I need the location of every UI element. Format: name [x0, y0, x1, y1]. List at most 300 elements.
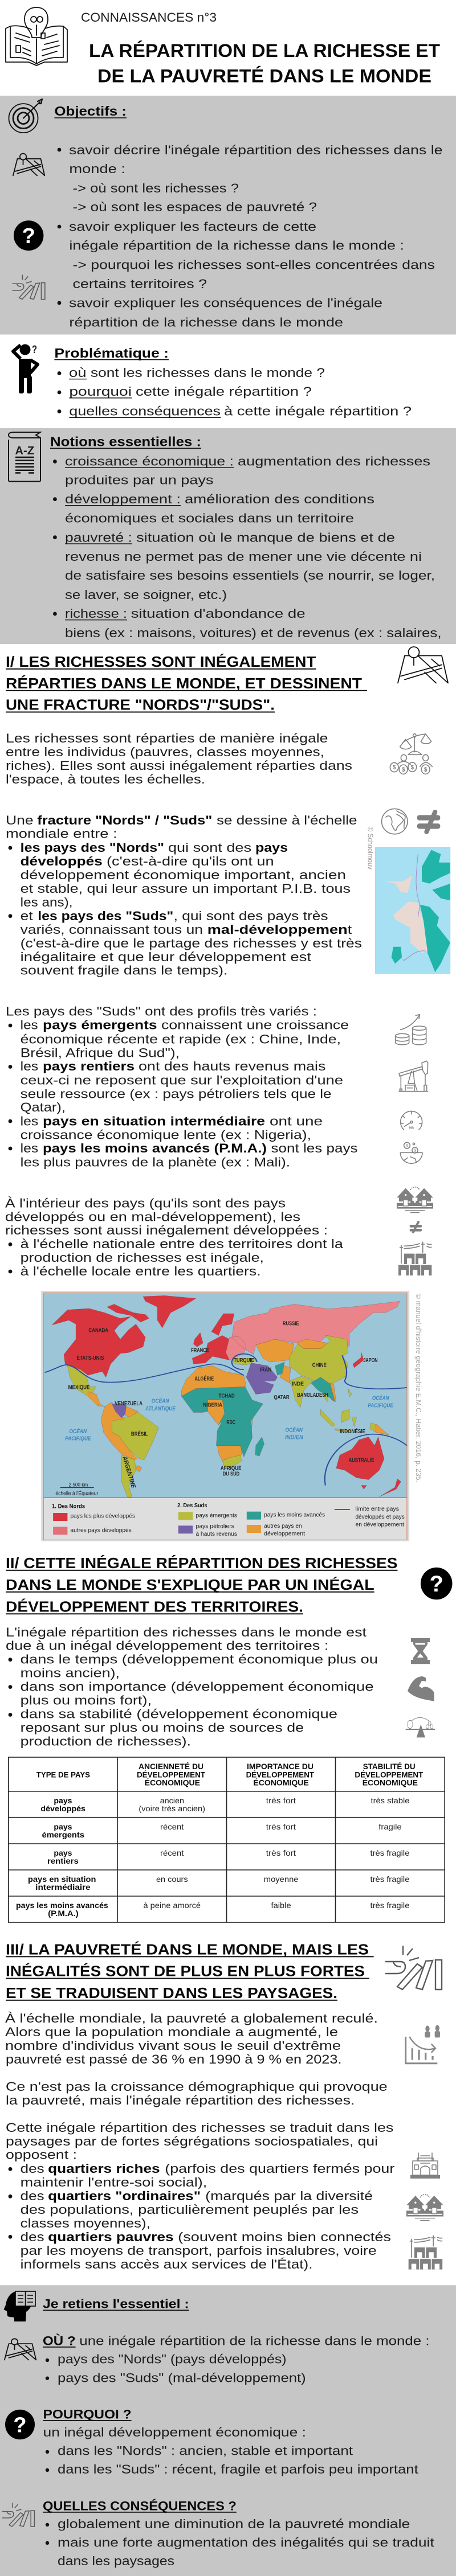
icon: rich mansion: [410, 2153, 440, 2179]
text block: fracture Nords / Suds: développés: [21, 854, 103, 868]
icon: coins with rising arrow: [396, 1015, 426, 1045]
text block: ségrégations sociospatiales: classes moyennes),: [21, 2216, 150, 2230]
text block: inégal développement: dans sa stabilité (développement économique: [21, 1707, 337, 1721]
objectifs list: [58, 143, 443, 329]
text block: profils des Suds: seule ressource (ex : pays pétroliers tels que le: [21, 1087, 332, 1101]
icon: scales and money: $: [393, 764, 396, 771]
title: DE LA PAUVRETÉ DANS LE MONDE: [97, 66, 431, 87]
icon: question mark (section II): ?: [429, 1572, 443, 1597]
text block: fracture Nords / Suds: mal-développemen: [207, 922, 348, 937]
text block: fracture Nords / Suds: les ans),: [21, 895, 73, 909]
objectifs list: certains territoires ?: [73, 277, 207, 291]
text block: profils des Suds: croissance économique lente (ex : Nigeria),: [21, 1127, 311, 1142]
text block: inégalités à l'intérieur des pays: [5, 1196, 344, 1278]
table header: [36, 1762, 424, 1787]
text block: inégal développement: moins ancien),: [21, 1666, 120, 1680]
objectifs list: monde :: [69, 162, 125, 176]
text block: inégalités entre individus: Les richesses sont réparties de manière inégale: [6, 731, 328, 745]
map legend: limite entre pays: [355, 1506, 400, 1512]
text block: profils des Suds: Les pays des "Suds" ont des profils très variés :: [6, 1004, 317, 1019]
map scale: échelle à l'Équateur: [55, 1490, 99, 1496]
icon: muscle arm: [408, 1676, 434, 1701]
text block: ségrégations sociospatiales: (souvent moins bien connectés: [178, 2230, 391, 2244]
heading: section II: DANS LE MONDE S'EXPLIQUE PAR UN INÉGAL: [6, 1577, 374, 1593]
text block: fracture Nords / Suds: variés, connaissant tous un: [21, 922, 203, 937]
map legend: à hauts revenus: [196, 1531, 237, 1537]
objectifs list: inégale répartition de la richesse dans le monde :: [69, 239, 404, 253]
text block: profils des Suds: [6, 1004, 358, 1169]
text block: ségrégations sociospatiales: Cette inégale répartition des richesses se traduit dans les: [6, 2120, 393, 2135]
map legend: autres pays en: [264, 1523, 302, 1529]
table rows: à peine amorcé: [144, 1901, 201, 1910]
map: small rotated world map: [375, 847, 450, 974]
text block: ségrégations sociospatiales: quartiers pauvres: [48, 2230, 174, 2244]
map legend: en développement: [355, 1522, 404, 1528]
map labels: ALGÉRIE: [194, 1376, 214, 1382]
text block: inégalités entre individus: l'espace, à toutes les échelles.: [6, 772, 205, 786]
caption: map source: © manuel d'histoire géographie E.M.C., Hatier, 2016, p. 235.: [414, 1294, 422, 1482]
table rows: rentiers: [47, 1856, 79, 1865]
icon: broken bowl with dollars: $: [406, 1143, 408, 1148]
table header: DÉVELOPPEMENT: [246, 1770, 314, 1779]
text block: fracture Nords / Suds: développement économique important, ancien: [21, 868, 346, 882]
text block: ségrégations sociospatiales: la pauvreté, mais l'inégale répartition des richesses.: [6, 2093, 355, 2107]
icon: falling dominoes (section III): [385, 1946, 442, 1990]
text block: ségrégations sociospatiales: informels sans accès aux services de l'État).: [21, 2257, 312, 2271]
text block: profils des Suds: les: [21, 1059, 38, 1073]
heading: section III: III/ LA PAUVRETÉ DANS LE MONDE, MAIS LES: [6, 1942, 369, 1958]
icon: map with pin: [13, 154, 44, 175]
text block: ségrégations sociospatiales: des: [21, 2189, 44, 2203]
text block: profils des Suds: pays les moins avancés (P.M.A.): [43, 1141, 267, 1155]
notions list: économiques et sociales dans un territoire: [65, 511, 354, 526]
ocean labels: PACIFIQUE: [65, 1436, 91, 1442]
text block: profils des Suds: les: [21, 1141, 38, 1155]
heading: section I: I/ LES RICHESSES SONT INÉGALEMENT: [6, 654, 316, 670]
icon: thinking person: [13, 344, 38, 393]
panel: problématique: [13, 344, 412, 418]
text block: profils des Suds: les: [21, 1018, 38, 1032]
map labels: DU SUD: [223, 1471, 239, 1477]
table rows: (P.M.A.): [48, 1909, 79, 1918]
problématique list: où: [69, 366, 87, 380]
map legend: 2. Des Suds: [177, 1503, 207, 1509]
map labels: VENEZUELA: [115, 1401, 142, 1407]
ocean labels: PACIFIQUE: [368, 1402, 393, 1409]
block: pourquoi: [43, 2407, 418, 2476]
objectifs list: savoir décrire l'inégale répartition des richesses dans le: [69, 143, 442, 157]
icon: question mark (summary): ?: [13, 2413, 27, 2437]
objectifs list: -> pourquoi les richesses sont-elles concentrées dans: [73, 258, 435, 272]
objectifs list: savoir expliquer les facteurs de cette: [69, 220, 316, 234]
text block: ségrégations sociospatiales: [6, 2079, 394, 2271]
panel: notions essentielles: [0, 428, 456, 644]
heading: section I: [6, 654, 367, 713]
text block: fracture Nords / Suds: souvent fragile dans le temps).: [21, 963, 227, 978]
problématique list: à cette inégale répartition ?: [224, 404, 412, 418]
icon: falling dominoes: [12, 275, 45, 300]
block: où: une inégale répartition de la richesse dans le monde :: [79, 2333, 430, 2348]
icon: scales and money: $: [402, 766, 405, 773]
icon: scales and money: [390, 734, 432, 774]
table rows: très fragile: [370, 1901, 410, 1910]
icon: speedometer: MB: [409, 1126, 414, 1130]
table header: ÉCONOMIQUE: [363, 1778, 418, 1787]
map labels: AUSTRALIE: [349, 1458, 374, 1463]
table rows: faible: [271, 1901, 291, 1910]
block: pourquoi: dans les "Suds" : récent, fragile et parfois peu important: [58, 2462, 418, 2476]
table rows: pays: [54, 1848, 72, 1857]
icon: head with book: [4, 2291, 35, 2321]
text block: recul de la pauvreté: Alors que la population mondiale a augmenté, le: [5, 2025, 338, 2039]
text block: ségrégations sociospatiales: des: [21, 2230, 44, 2244]
text block: fracture Nords / Suds: Une: [6, 813, 34, 827]
objectifs list: savoir expliquer les conséquences de l'inégale: [69, 296, 382, 310]
ocean labels: OCÉAN: [69, 1428, 87, 1435]
table header: IMPORTANCE DU: [247, 1762, 314, 1771]
map labels: QATAR: [274, 1394, 290, 1401]
map labels: CHINE: [312, 1362, 327, 1368]
text block: fracture Nords / Suds: fracture "Nords" / "Suds": [37, 813, 212, 827]
title: [89, 40, 440, 87]
objectifs list: -> où sont les espaces de pauvreté ?: [73, 200, 317, 214]
block: quelles conséquences: QUELLES CONSÉQUENCES ?: [43, 2499, 237, 2513]
text block: inégalités à l'intérieur des pays: développés ou en mal-développement), les: [5, 1209, 300, 1224]
icon: globe: [382, 809, 408, 834]
icon: oil pump: [399, 1061, 428, 1092]
table rows: très fort: [266, 1822, 296, 1831]
heading: section II: II/ CETTE INÉGALE RÉPARTITION DES RICHESSES: [6, 1555, 398, 1572]
map labels: TURQUIE: [234, 1357, 254, 1364]
table rows: ancien: [160, 1796, 184, 1805]
block: quelles conséquences: globalement une diminution de la pauvreté mondiale: [58, 2517, 410, 2531]
table header: ÉCONOMIQUE: [145, 1778, 200, 1787]
map scale: [55, 1482, 99, 1496]
text block: profils des Suds: économique récente et rapide (ex : Chine, Inde,: [21, 1032, 341, 1047]
table header: ÉCONOMIQUE: [253, 1778, 309, 1787]
icon: poor neighbourhood (section III): [409, 2235, 442, 2270]
panel: objectifs: [0, 96, 456, 335]
ocean labels: OCÉAN: [286, 1427, 303, 1433]
map labels: RUSSIE: [283, 1321, 299, 1327]
map labels: MEXIQUE: [68, 1385, 90, 1390]
panel: je retiens l'essentiel: [0, 2285, 456, 2576]
text block: profils des Suds: pays rentiers: [43, 1059, 135, 1073]
icon: map with pin (section I): [398, 647, 448, 683]
problématique list: [58, 366, 412, 418]
text block: recul de la pauvreté: pauvreté est passé de 36 % en 1990 à 9 % en 2023.: [6, 2052, 342, 2066]
notions list: amélioration des conditions: [185, 492, 374, 506]
text block: inégal développement: due à un inégal développement des territoires :: [6, 1639, 328, 1652]
map labels: NIGERIA: [203, 1402, 222, 1408]
title: LA RÉPARTITION DE LA RICHESSE ET: [89, 40, 440, 61]
block: pourquoi: dans les "Nords" : ancien, stable et important: [58, 2444, 353, 2458]
icon: A-Z dictionary: A-Z: [15, 445, 34, 457]
text block: inégalités à l'intérieur des pays: à l'échelle nationale entre des territoires dont la: [21, 1237, 344, 1251]
block: quelles conséquences: dans les paysages: [58, 2554, 174, 2568]
text block: fracture Nords / Suds: qui sont des: [168, 840, 251, 855]
text block: profils des Suds: connaissent une croissance: [161, 1018, 349, 1032]
map legend: pays émergents: [196, 1513, 237, 1519]
icon: question mark: [14, 220, 43, 251]
text block: profils des Suds: Qatar),: [21, 1100, 66, 1114]
icon: question mark (section II): [421, 1568, 453, 1599]
table header: DÉVELOPPEMENT: [355, 1770, 424, 1779]
text block: fracture Nords / Suds: et stable, qui leur assure un important P.I.B. tous: [21, 881, 351, 896]
table rows: pays: [54, 1822, 72, 1831]
map labels: BANGLADESH: [297, 1392, 328, 1398]
icon: question mark (summary): [5, 2410, 35, 2439]
text block: ségrégations sociospatiales: des: [21, 2161, 44, 2176]
text block: ségrégations sociospatiales: quartiers "ordinaires": [48, 2189, 201, 2203]
table rows: (voire très ancien): [139, 1804, 205, 1813]
heading: je retiens l'essentiel: Je retiens l'essentiel :: [43, 2296, 189, 2311]
icon: small not equal: [410, 1222, 422, 1232]
map legend: 1. Des Nords: [52, 1504, 85, 1509]
text block: profils des Suds: les plus pauvres de la planète (ex : Mali).: [21, 1155, 290, 1169]
text block: inégal développement: plus ou moins fort),: [21, 1693, 152, 1708]
notions list: situation où le manque de biens et de: [136, 530, 395, 544]
label: connaissances n°3: CONNAISSANCES n°3: [81, 10, 217, 24]
text block: fracture Nords / Suds: (c'est-à-dire qu'ils ont un: [107, 854, 274, 868]
text block: fracture Nords / Suds: t: [348, 922, 352, 937]
icon: scales and money: $: [424, 766, 427, 773]
text block: inégalités entre individus: [6, 731, 352, 786]
problématique list: pourquoi: [69, 384, 132, 399]
text block: profils des Suds: pays en situation intermédiaire: [43, 1114, 265, 1128]
heading: section III: ET SE TRADUISENT DANS LES PAYSAGES.: [6, 1986, 337, 2001]
text block: fracture Nords / Suds: mondiale entre :: [6, 827, 117, 841]
text block: profils des Suds: les: [21, 1114, 38, 1128]
text block: ségrégations sociospatiales: quartiers riches: [48, 2161, 160, 2176]
icon: target with arrow: [9, 99, 42, 133]
table header: DÉVELOPPEMENT: [137, 1770, 205, 1779]
map: developed and developing countries of the world: [41, 1291, 409, 1541]
table header: STABILITÉ DU: [363, 1762, 416, 1771]
icon: open book with light bulb: [6, 7, 67, 65]
block: pourquoi: POURQUOI ?: [43, 2407, 132, 2421]
map labels: FRANCE: [191, 1348, 209, 1353]
text block: ségrégations sociospatiales: des populations, particulièrement peuplés par les: [21, 2202, 359, 2217]
icon: thinking person: ?: [32, 344, 37, 356]
icon: falling dominoes (summary): [2, 2503, 34, 2526]
heading: objectifs: Objectifs :: [54, 104, 127, 118]
map labels: RDC: [226, 1420, 235, 1426]
table rows: moyenne: [264, 1874, 299, 1884]
icon: map with pin (summary): [5, 2339, 36, 2360]
block: où: pays des "Suds" (mal-développement): [58, 2370, 306, 2385]
text block: profils des Suds: Brésil, Afrique du Sud"),: [21, 1046, 180, 1060]
text block: inégal développement: L'inégale répartition des richesses dans le monde est: [6, 1625, 367, 1639]
table rows: récent: [160, 1822, 184, 1831]
block: quelles conséquences: [43, 2499, 434, 2568]
block: où: pays des "Nords" (pays développés): [58, 2352, 287, 2366]
table rows: pays: [54, 1796, 72, 1805]
map legend: autres pays développés: [70, 1527, 132, 1533]
notions list: se laver, se soigner, etc.): [65, 588, 227, 602]
text block: fracture Nords / Suds: (c'est-à-dire que le partage des richesses y est très: [21, 936, 362, 950]
notions list: situation d'abondance de: [131, 606, 306, 621]
table header: TYPE DE PAYS: [36, 1770, 90, 1779]
problématique list: cette inégale répartition ?: [136, 384, 312, 399]
heading: section I: RÉPARTIES DANS LE MONDE, ET DESSINENT: [6, 675, 362, 692]
icon: question mark: ?: [22, 224, 35, 248]
heading: section III: INÉGALITÉS SONT DE PLUS EN PLUS FORTES: [6, 1963, 365, 1980]
caption: © Schoolmouv: © Schoolmouv: [366, 827, 375, 869]
icon: falling poverty chart: [406, 2025, 440, 2064]
map labels: [68, 1321, 378, 1489]
ocean labels: OCÉAN: [152, 1398, 169, 1404]
text block: fracture Nords / Suds: les pays des "Suds": [38, 909, 173, 923]
table rows: développés: [40, 1804, 85, 1813]
map legend: développés et pays: [355, 1514, 405, 1520]
text block: fracture Nords / Suds: les pays des "Nords": [21, 840, 164, 855]
map labels: AFRIQUE: [221, 1465, 242, 1471]
problématique list: sont les richesses dans le monde ?: [91, 366, 325, 380]
text block: inégalités entre individus: entre les individus (pauvres, classes moyennes,: [6, 745, 324, 759]
table rows: très fragile: [370, 1874, 410, 1884]
text block: inégalités à l'intérieur des pays: À l'intérieur des pays (qu'ils sont des pays: [5, 1196, 286, 1210]
icon: balance: [406, 1717, 435, 1737]
notions list: produites par un pays: [65, 473, 213, 487]
ocean labels: [65, 1395, 393, 1442]
notions list: augmentation des richesses: [238, 454, 430, 468]
icon: middle-class houses: [397, 1187, 433, 1213]
heading: problématique: Problématique :: [54, 346, 169, 360]
text block: fracture Nords / Suds: [6, 813, 362, 978]
text block: fracture Nords / Suds: inégalitaire et que leur développement est: [21, 950, 311, 964]
objectifs list: répartition de la richesse dans le monde: [69, 315, 343, 329]
icon: hourglass: [411, 1638, 430, 1664]
text block: inégal développement: dans son importance (développement économique: [21, 1680, 374, 1693]
heading: section III: [6, 1942, 374, 2001]
map legend: développement: [264, 1531, 305, 1537]
text block: inégalités à l'intérieur des pays: production de richesses est inégale,: [21, 1250, 264, 1265]
continents: [52, 1295, 401, 1498]
table rows: pays les moins avancés: [16, 1901, 108, 1910]
table rows: très fragile: [370, 1848, 410, 1857]
icon: speedometer: [401, 1111, 422, 1130]
heading: section I: UNE FRACTURE "NORDS"/"SUDS".: [6, 698, 275, 713]
icon: broken bowl with dollars: [400, 1142, 422, 1163]
text block: ségrégations sociospatiales: (parfois des quartiers fermés pour: [165, 2161, 394, 2176]
text block: fracture Nords / Suds: , qui sont des pays très: [174, 909, 328, 923]
icon: A-Z dictionary: [9, 432, 40, 482]
text block: inégal développement: reposant sur plus ou moins de sources de: [21, 1720, 304, 1734]
text block: inégal développement: dans le temps (développement économique plus ou: [21, 1652, 378, 1667]
problématique list: quelles conséquences: [69, 404, 221, 418]
text block: inégalités entre individus: riches). Elles sont aussi inégalement réparties dans: [6, 758, 352, 773]
block: pourquoi: un inégal développement économique :: [43, 2425, 306, 2439]
heading: section II: DÉVELOPPEMENT DES TERRITOIRES.: [6, 1599, 303, 1615]
icon: not equal: [417, 812, 440, 832]
text block: fracture Nords / Suds: se dessine à l'échelle: [217, 813, 357, 827]
notions list: pauvreté :: [65, 530, 132, 544]
table rows: en cours: [156, 1874, 188, 1884]
map labels: TCHAD: [219, 1393, 235, 1399]
block: où: OÙ ?: [43, 2333, 76, 2348]
table rows: [16, 1796, 410, 1918]
block: où: [43, 2333, 430, 2385]
notions list: biens (ex : maisons, voitures) et de revenus (ex : salaires,: [65, 626, 441, 640]
icon: scales and money: $: [411, 764, 414, 771]
text block: inégal développement: production de richesses).: [21, 1734, 191, 1748]
map labels: JAPON: [363, 1357, 378, 1364]
text block: fracture Nords / Suds: pays: [255, 840, 288, 855]
table rows: très fort: [266, 1848, 296, 1857]
map legend: pays les plus développés: [70, 1513, 136, 1519]
text block: profils des Suds: pays émergents: [43, 1018, 157, 1032]
map labels: INDONÉSIE: [340, 1428, 365, 1435]
notions list: richesse :: [65, 606, 127, 621]
heading: notions essentielles: Notions essentielles :: [50, 434, 201, 449]
map legend: pays les moins avancés: [264, 1512, 325, 1518]
block: quelles conséquences: mais une forte augmentation des inégalités qui se traduit: [58, 2535, 434, 2549]
text block: profils des Suds: ont des hauts revenus mais: [139, 1059, 325, 1073]
text block: recul de la pauvreté: À l'échelle mondiale, la pauvreté a globalement reculé.: [5, 2011, 378, 2025]
table rows: très stable: [370, 1796, 410, 1805]
table rows: intermédiaire: [35, 1882, 91, 1892]
text block: ségrégations sociospatiales: paysages par de fortes ségrégations sociospatiales, qui: [6, 2134, 378, 2148]
ocean labels: ATLANTIQUE: [145, 1406, 176, 1412]
text block: ségrégations sociospatiales: maintenir l'entre-soi social),: [21, 2175, 207, 2189]
limit line between developed and developing countries: [44, 1354, 407, 1486]
text block: inégalités à l'intérieur des pays: richesses sont aussi inégalement développées :: [5, 1223, 328, 1237]
map legend: [52, 1503, 405, 1537]
table rows: émergents: [42, 1830, 84, 1839]
notions list: développement :: [65, 492, 181, 506]
map labels: INDE: [292, 1381, 304, 1387]
text block: recul de la pauvreté: [5, 2011, 378, 2066]
text block: ségrégations sociospatiales: Ce n'est pas la croissance démographique qui provoque: [6, 2079, 388, 2094]
ocean labels: INDIEN: [285, 1435, 304, 1441]
text block: profils des Suds: sont les pays: [271, 1141, 358, 1155]
notions list: de satisfaire ses besoins essentiels (se nourrir, se loger,: [65, 568, 435, 583]
table: types de pays: [9, 1757, 445, 1922]
objectifs list: -> où sont les richesses ?: [73, 181, 239, 195]
text block: inégalités à l'intérieur des pays: à l'échelle locale entre les quartiers.: [21, 1264, 261, 1278]
text block: recul de la pauvreté: nombre d'individus vivant sous le seuil d'extrême: [5, 2038, 341, 2053]
table rows: pays en situation: [28, 1874, 96, 1884]
text block: ségrégations sociospatiales: par les moyens de transport, parfois insalubres, voire: [21, 2243, 377, 2258]
icon: broken bowl with dollars: $: [414, 1148, 416, 1153]
map labels: CANADA: [88, 1327, 108, 1334]
map scale: 2 500 km: [69, 1482, 88, 1488]
text block: inégal développement: [6, 1625, 378, 1748]
text block: ségrégations sociospatiales: opposent :: [6, 2148, 77, 2162]
map labels: ÉTATS-UNIS: [76, 1355, 104, 1361]
map labels: ARGENTINE: [121, 1456, 137, 1489]
notions list: revenus ne permet pas de mener une vie décente ni: [65, 549, 422, 564]
map labels: BRÉSIL: [131, 1431, 148, 1437]
heading: section II: [6, 1555, 398, 1615]
notions list: [53, 454, 441, 640]
text block: profils des Suds: ceux-ci ne reposent que sur l'exploitation d'une: [21, 1073, 343, 1088]
map labels: IRAN: [260, 1367, 271, 1373]
icon: middle-class houses (section III): [406, 2194, 443, 2221]
table rows: fragile: [378, 1822, 402, 1831]
notions list: croissance économique :: [65, 454, 234, 468]
text block: fracture Nords / Suds: et: [21, 909, 33, 923]
table rows: très fort: [266, 1796, 296, 1805]
text block: profils des Suds: ont une: [270, 1114, 323, 1128]
map legend: pays pétroliers: [196, 1524, 234, 1529]
table rows: récent: [160, 1848, 184, 1857]
table header: ANCIENNETÉ DU: [139, 1762, 203, 1771]
text block: ségrégations sociospatiales: (marqués par la diversité: [205, 2189, 373, 2203]
icon: poor neighbourhood: [398, 1242, 431, 1275]
ocean labels: OCÉAN: [372, 1395, 389, 1401]
